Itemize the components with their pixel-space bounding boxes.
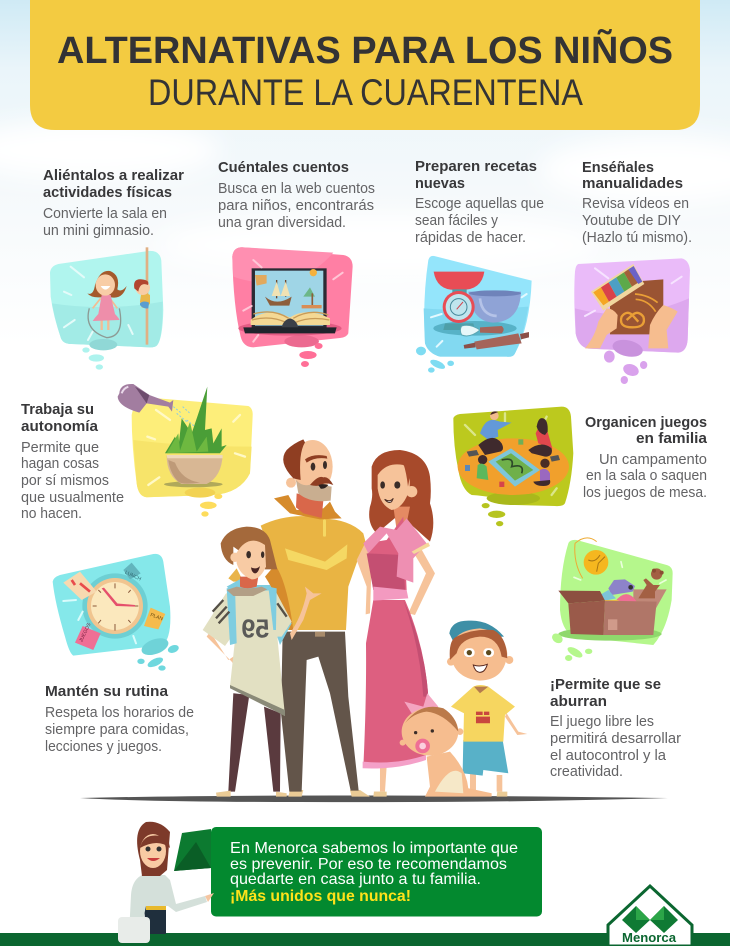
text: crafts: Youtube de DIY [582,213,681,229]
text: routine: siempre para comidas, [45,722,189,738]
text: crafts: Enséñales [582,159,654,176]
text: stories: Busca en la web cuentos [218,181,375,197]
callout: speech panel: ¡Más unidos que nunca! [230,888,411,905]
text: boredom: aburran [550,693,607,710]
text: stories: una gran diversidad. [218,215,346,231]
logo: Menorca: Menorca [622,931,677,945]
text: autonomy: autonomía [21,418,99,435]
text: autonomy: que usualmente [21,490,124,506]
text: boredom: El juego libre les [550,714,654,730]
callout: speech panel: En Menorca sabemos lo importante que [230,840,518,857]
text: routine: Mantén su rutina [45,683,169,700]
presenter woman [118,822,214,943]
icon: clock bubble: JUEGOS [78,622,93,643]
text: boredom [550,676,681,780]
girl: 59 [241,613,269,643]
boy [447,621,527,797]
text: autonomy: por sí mismos [21,473,109,489]
title banner [30,0,700,130]
icon: clock bubble: PLAN [149,612,164,622]
text: stories: Cuéntales cuentos [218,159,349,176]
ground shadow [80,796,668,802]
text: autonomy: no hacen. [21,506,82,522]
text: autonomy: hagan cosas [21,456,99,472]
mother [357,450,435,797]
text: crafts: (Hazlo tú mismo). [582,230,692,246]
text: recipes: rápidas de hacer. [415,230,526,246]
text: autonomy: Permite que [21,440,99,456]
icon: kitchen bubble [416,256,532,373]
text: recipes: Preparen recetas [415,158,537,175]
text: boredom: creatividad. [550,764,623,780]
text: physical activities: un mini gimnasio. [43,223,154,239]
callout: speech panel: quedarte en casa junto a tu familia. [230,871,481,888]
text: family games: Un campamento [599,452,707,468]
footer bar [0,933,730,946]
text: physical activities [43,167,184,239]
title line 2: DURANTE LA CUARENTENA [148,72,583,113]
girl [203,527,322,797]
text: physical activities: Aliéntalos a realizar [43,167,184,184]
text: physical activities: actividades físicas [43,184,172,201]
family illustration [203,439,527,797]
text: recipes: sean fáciles y [415,213,499,229]
icon: watering plant bubble [118,384,253,517]
text: physical activities: Convierte la sala en [43,206,167,222]
callout: speech panel: es prevenir. Por eso te recomendamos [230,856,507,873]
text: crafts: Revisa vídeos en [582,196,689,212]
text: stories: para niños, encontrarás [218,198,374,214]
icon: toy box bubble [550,538,673,661]
text: stories [218,159,375,231]
icon: crafts bubble [574,258,690,384]
text: family games [583,414,708,501]
icon: story book bubble [232,247,353,367]
icon: jump rope bubble [50,247,163,370]
text: boredom: permitirá desarrollar [550,731,681,747]
text: crafts [582,159,692,246]
text: family games: en la sala o saquen [586,468,707,484]
icon: clock bubble: LUNCH [124,570,142,583]
title line 1: ALTERNATIVAS PARA LOS NIÑOS [57,28,673,72]
text: routine [45,683,194,755]
text: boredom: el autocontrol y la [550,748,667,764]
father [261,439,375,797]
text: family games: los juegos de mesa. [583,485,707,501]
text: recipes: nuevas [415,175,465,192]
text: crafts: manualidades [582,175,683,192]
callout: speech panel [174,827,542,916]
text: recipes [415,158,544,246]
text: recipes: Escoge aquellas que [415,196,544,212]
icon: board games bubble [453,407,573,526]
text: autonomy: Trabaja su [21,401,94,418]
text: routine: lecciones y juegos. [45,739,162,755]
text: boredom: ¡Permite que se [550,676,661,693]
text: autonomy [21,401,124,522]
baby [400,693,492,797]
text: family games: Organicen juegos [585,414,707,431]
text: family games: en familia [636,430,708,447]
icon: clock bubble [53,554,180,671]
text: routine: Respeta los horarios de [45,705,194,721]
logo: Menorca [608,886,692,946]
